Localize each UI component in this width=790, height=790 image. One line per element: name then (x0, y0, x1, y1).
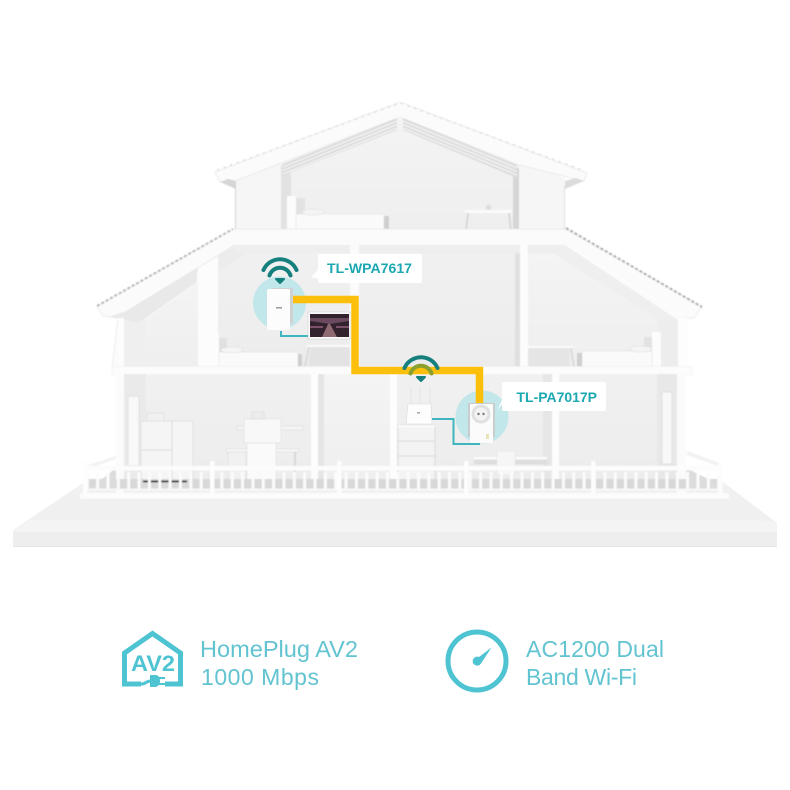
right bedroom bed (577, 332, 661, 367)
wifi icon: upstairs (264, 259, 296, 283)
wardrobe (141, 413, 193, 483)
wardrobe plinth (143, 480, 187, 482)
floor band (112, 366, 692, 374)
attic table (465, 205, 512, 231)
fence (80, 451, 729, 498)
attic storey (215, 102, 587, 234)
router (406, 387, 432, 424)
laptop (308, 312, 350, 339)
ethernet cable: router (432, 419, 480, 444)
right bedroom desk (528, 346, 574, 367)
study desk and chair (226, 412, 303, 487)
text: AC1200 Dual Band Wi-Fi: AC1200 Dual (526, 636, 664, 662)
right door (662, 392, 672, 464)
left bedroom bed (210, 334, 302, 367)
ethernet cable: laptop (281, 331, 308, 336)
balcony floor (85, 468, 720, 490)
wifi icon: centre (404, 357, 438, 381)
callout: TL-WPA7617: TL-WPA7617 (327, 260, 412, 276)
text: HomePlug AV2 1000 Mbps: 1000 Mbps (201, 664, 319, 690)
dining table and chair (474, 451, 547, 475)
ground storey (116, 374, 686, 494)
middle storey (97, 228, 702, 368)
left door (128, 396, 139, 466)
feature: AC1200 Dual Band Wi-Fi (448, 632, 664, 690)
device: TL-PA7017P adapter (468, 403, 495, 443)
text: AC1200 Dual Band Wi-Fi (526, 636, 664, 690)
callout: TL-WPA7617 (311, 254, 422, 283)
icon: AV2 house with plug (124, 634, 180, 687)
text: HomePlug AV2 1000 Mbps (200, 636, 358, 690)
callout: TL-PA7017P: TL-PA7017P (516, 389, 597, 405)
house (80, 102, 729, 498)
callout: TL-PA7017P (497, 382, 606, 411)
device circle: TL-WPA7617 (253, 276, 306, 330)
text: HomePlug AV2 1000 Mbps: HomePlug AV2 (200, 636, 358, 662)
device: TL-WPA7617 adapter (267, 288, 293, 330)
cabinet (398, 425, 435, 482)
icon: speed gauge (448, 632, 506, 690)
attic bed (287, 196, 389, 231)
feature: HomePlug AV2 (124, 634, 358, 690)
powerline cable (293, 300, 480, 404)
base platform (13, 482, 777, 546)
device circle: TL-PA7017P (456, 390, 508, 444)
laptop desk (304, 345, 350, 367)
text: AC1200 Dual Band Wi-Fi: Band Wi-Fi (526, 664, 637, 690)
icon: AV2 house with plug: AV2 (131, 651, 175, 676)
